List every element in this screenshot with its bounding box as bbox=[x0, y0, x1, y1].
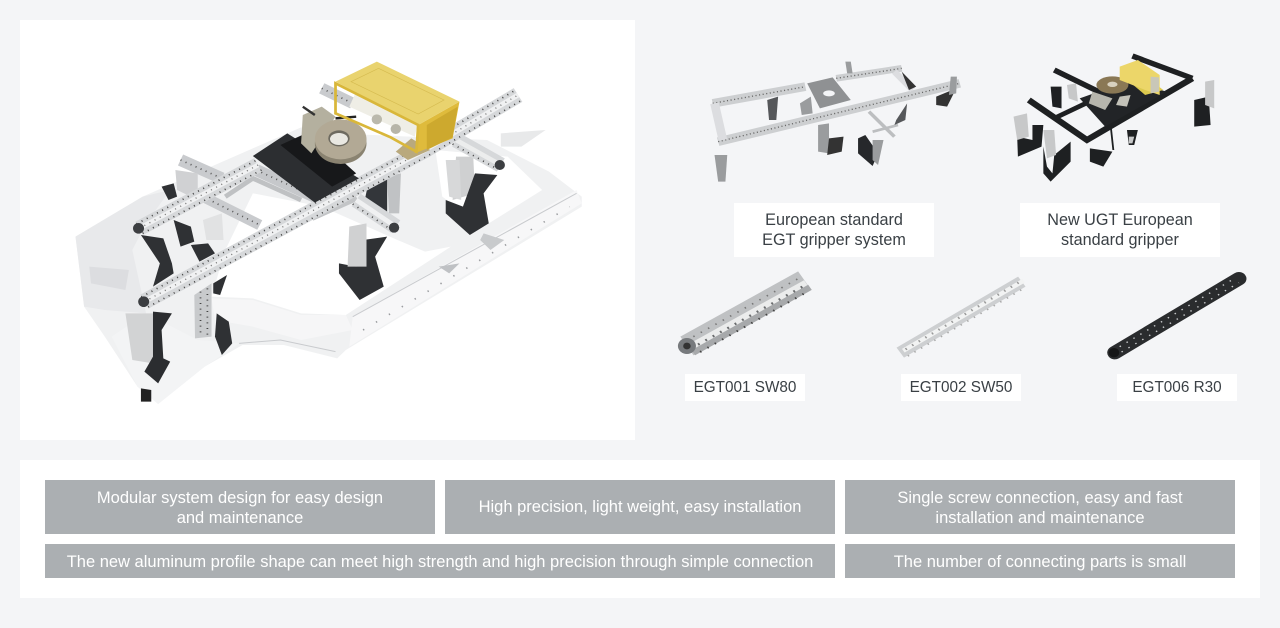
rear silver posts bbox=[175, 157, 475, 240]
black gripper parts, rear bbox=[141, 173, 497, 300]
grippers bbox=[1017, 87, 1211, 182]
label: EGT006 R30 bbox=[1117, 374, 1237, 401]
label: European standard EGT gripper system: EGT gripper system bbox=[762, 231, 906, 249]
label: European standard EGT gripper system bbox=[734, 203, 934, 257]
rear beams bbox=[181, 88, 401, 225]
beam end caps bbox=[133, 160, 505, 307]
front post and grippers bbox=[125, 160, 461, 402]
label: EGT002 SW50: EGT002 SW50 bbox=[910, 378, 1012, 396]
feature: precision: High precision, light weight, easy installation bbox=[479, 498, 801, 516]
label: New UGT European standard gripper bbox=[1020, 203, 1220, 257]
illustration: three profile tubes bbox=[678, 272, 1246, 360]
feature: precision bbox=[445, 480, 835, 534]
yellow enclosure bbox=[336, 62, 459, 153]
base plate, flange, yellow box bbox=[1080, 60, 1167, 127]
feature: modular design bbox=[45, 480, 435, 534]
illustration: gripper system mounted on car body bbox=[76, 62, 582, 404]
center plate bbox=[807, 77, 851, 108]
rotary flange bbox=[301, 107, 367, 164]
feature: aluminum profile: The new aluminum profile shape can meet high strength and high precision through simple connection bbox=[67, 552, 813, 570]
grippers bbox=[715, 62, 957, 182]
long beams bbox=[136, 91, 521, 307]
label: EGT002 SW50 bbox=[901, 374, 1021, 401]
label: EGT006 R30: EGT006 R30 bbox=[1132, 378, 1222, 396]
silver gripper plates bbox=[1014, 80, 1214, 158]
feature: single screw: Single screw connection, easy and fast bbox=[897, 488, 1183, 506]
frame bbox=[713, 68, 960, 142]
label: New UGT European standard gripper: New UGT European bbox=[1047, 211, 1193, 229]
illustration: European standard EGT gripper bbox=[710, 62, 961, 182]
panel: features bbox=[20, 460, 1260, 598]
feature: aluminum profile bbox=[45, 544, 835, 578]
feature: few connecting parts: The number of connecting parts is small bbox=[894, 552, 1186, 570]
black base plate and mount bbox=[253, 132, 430, 203]
label: EGT001 SW80: EGT001 SW80 bbox=[694, 378, 796, 396]
tube SW80 bbox=[678, 277, 810, 354]
feature: single screw bbox=[845, 480, 1235, 534]
feature: few connecting parts bbox=[845, 544, 1235, 578]
black frame bbox=[1029, 56, 1192, 140]
tube R30 bbox=[1109, 277, 1239, 357]
label: New UGT European standard gripper: standard gripper bbox=[1061, 231, 1179, 249]
label: European standard EGT gripper system: European standard bbox=[765, 211, 903, 229]
label: EGT001 SW80 bbox=[685, 374, 805, 401]
feature: modular design: Modular system design for easy design bbox=[97, 488, 383, 506]
car body bbox=[75, 127, 582, 404]
illustration: New UGT European gripper bbox=[1014, 54, 1214, 182]
feature: single screw: installation and maintenance bbox=[935, 508, 1145, 526]
panel: main product image bbox=[20, 20, 635, 440]
feature: modular design: and maintenance bbox=[177, 508, 303, 526]
tube SW50 bbox=[900, 281, 1026, 356]
